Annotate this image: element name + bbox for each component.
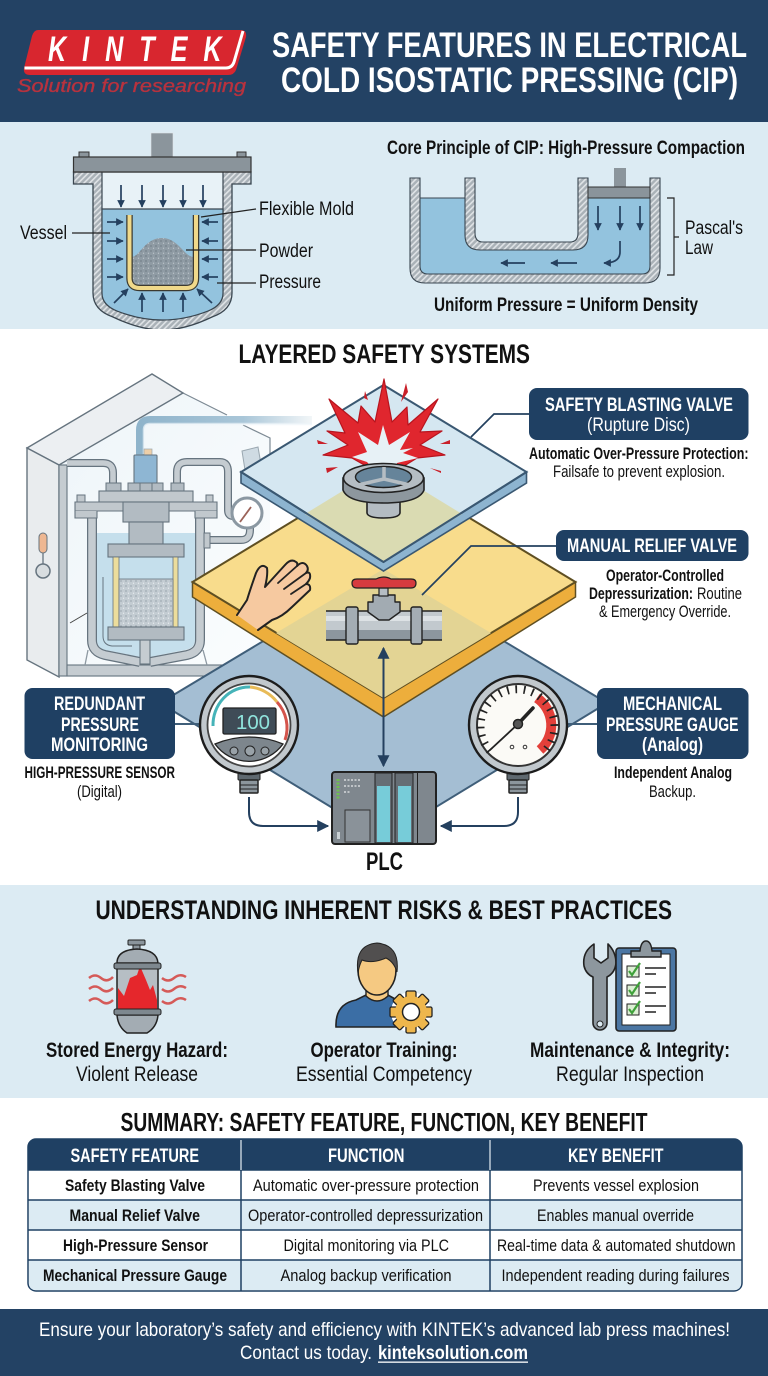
label: PLC: PLC xyxy=(366,848,403,876)
icon: PLC controller xyxy=(332,772,436,844)
layer: manual relief valve plate xyxy=(192,466,576,717)
callout: mechanical pressure gauge: (Analog) xyxy=(642,735,703,756)
callout: manual relief valve xyxy=(422,530,748,621)
text: operator training xyxy=(296,1039,472,1086)
table rows xyxy=(43,1176,736,1285)
text: stored energy hazard xyxy=(46,1039,228,1086)
arrow: digital sensor to PLC xyxy=(249,797,328,826)
text: maintenance and integrity: Regular Inspection xyxy=(556,1063,704,1086)
icon: digital pressure gauge xyxy=(200,676,298,793)
callout: redundant pressure monitoring: MONITORING xyxy=(51,735,148,756)
caption: uniform pressure: Uniform Pressure = Uniform Density xyxy=(434,295,698,316)
callout: manual relief valve: Routine xyxy=(697,585,742,603)
title xyxy=(272,26,747,100)
arrow: valve to PLC xyxy=(382,648,384,766)
table header xyxy=(70,1146,664,1167)
heading: layered safety systems: LAYERED SAFETY SYSTEMS xyxy=(238,339,530,369)
table rows: Automatic over-pressure protection xyxy=(253,1176,479,1195)
panel: header xyxy=(0,0,768,122)
pipes xyxy=(140,420,312,455)
table rows: Enables manual override xyxy=(537,1206,694,1225)
diagram: Pascal's law U-tube: Pascal's xyxy=(685,218,743,239)
diagram: Pascal's law U-tube xyxy=(410,168,743,283)
pressure arrows xyxy=(107,185,218,312)
diagram: pressure vessel xyxy=(20,133,354,330)
bottle xyxy=(242,447,262,470)
logo: KINTEK: Solution for researching xyxy=(17,76,246,96)
text: stored energy hazard: Stored Energy Hazard: xyxy=(46,1039,228,1062)
panel: footer call to action: Contact us today. xyxy=(240,1342,372,1364)
table header: SAFETY FEATURE xyxy=(70,1146,199,1167)
callout: redundant pressure monitoring: HIGH-PRESSURE SENSOR xyxy=(24,764,175,782)
vessel labels: Vessel xyxy=(20,223,67,244)
panel: footer call to action: kinteksolution.com xyxy=(378,1342,528,1364)
table rows: Safety Blasting Valve xyxy=(65,1176,205,1195)
panel: core principle band xyxy=(0,122,768,330)
knob xyxy=(39,533,47,553)
flexible mold and powder xyxy=(130,215,196,288)
arrow: analog gauge to PLC xyxy=(441,797,518,826)
icon: wrench and clipboard xyxy=(584,941,676,1031)
vessel labels: Flexible Mold xyxy=(259,199,354,220)
callout: mechanical pressure gauge: Backup. xyxy=(649,783,696,801)
callout: redundant pressure monitoring: REDUNDANT xyxy=(54,694,145,715)
vessel labels xyxy=(20,199,354,293)
callout: mechanical pressure gauge xyxy=(597,688,748,801)
callout: safety blasting valve: Failsafe to prevent explosion. xyxy=(553,463,725,481)
diagram: Pascal's law U-tube: Law xyxy=(685,238,713,259)
panel: footer call to action xyxy=(0,1309,768,1376)
text: operator training: Operator Training: xyxy=(310,1039,458,1062)
panel: inherent risks and best practices xyxy=(0,885,768,1098)
layer: PLC diamond xyxy=(160,569,607,839)
illustration: CIP machine cabinet xyxy=(27,374,312,677)
panel: summary xyxy=(0,1098,768,1309)
text: maintenance and integrity xyxy=(530,1039,730,1086)
vessel labels: Powder xyxy=(259,241,314,262)
icon: hand xyxy=(237,561,310,630)
icon: explosion burst xyxy=(317,379,450,473)
icon: digital pressure gauge: 100 xyxy=(236,712,270,734)
icon: manual relief valve xyxy=(326,577,442,644)
table rows: Analog backup verification xyxy=(280,1266,452,1285)
text: stored energy hazard: Violent Release xyxy=(76,1063,198,1086)
icon: rupture disc valve xyxy=(343,464,424,518)
table: summary xyxy=(28,1139,742,1291)
callout: mechanical pressure gauge: MECHANICAL xyxy=(623,694,722,715)
callout: redundant pressure monitoring: PRESSURE xyxy=(61,715,139,736)
text: operator training: Essential Competency xyxy=(296,1063,472,1086)
table rows: High-Pressure Sensor xyxy=(63,1236,208,1255)
callout: redundant pressure monitoring xyxy=(24,688,175,801)
vessel interior xyxy=(97,533,195,657)
table rows: Operator-controlled depressurization xyxy=(248,1206,483,1225)
callout: redundant pressure monitoring: (Digital) xyxy=(77,783,122,801)
callout: mechanical pressure gauge: Independent Analog xyxy=(614,764,732,782)
table rows: Manual Relief Valve xyxy=(70,1206,200,1225)
callout: safety blasting valve: (Rupture Disc) xyxy=(587,415,690,436)
callout: manual relief valve: Operator-Controlled xyxy=(606,567,724,585)
icon: stored energy tank xyxy=(89,940,186,1033)
callout: safety blasting valve xyxy=(471,388,748,481)
text: maintenance and integrity: Maintenance & Integrity: xyxy=(530,1039,730,1062)
table header: KEY BENEFIT xyxy=(568,1146,664,1167)
icon: operator with gear xyxy=(336,943,432,1033)
callout: manual relief valve: Depressurization: xyxy=(589,585,693,603)
callout: manual relief valve: & Emergency Override. xyxy=(599,603,731,621)
connector lines to gauges xyxy=(175,723,597,725)
logo: KINTEK: KINTEK xyxy=(48,30,223,69)
small gauge xyxy=(232,498,262,528)
layer: safety blasting valve plate xyxy=(241,385,526,571)
table rows: Prevents vessel explosion xyxy=(533,1176,699,1195)
table rows: Independent reading during failures xyxy=(502,1266,730,1285)
vessel labels: Pressure xyxy=(259,272,321,293)
table rows: Digital monitoring via PLC xyxy=(284,1236,449,1255)
table header: FUNCTION xyxy=(328,1146,404,1167)
icon: analog pressure gauge xyxy=(469,676,567,793)
icon: gear xyxy=(390,991,432,1033)
table rows: Mechanical Pressure Gauge xyxy=(43,1266,227,1285)
logo: KINTEK xyxy=(17,30,246,96)
panel: layered safety systems xyxy=(0,329,768,885)
